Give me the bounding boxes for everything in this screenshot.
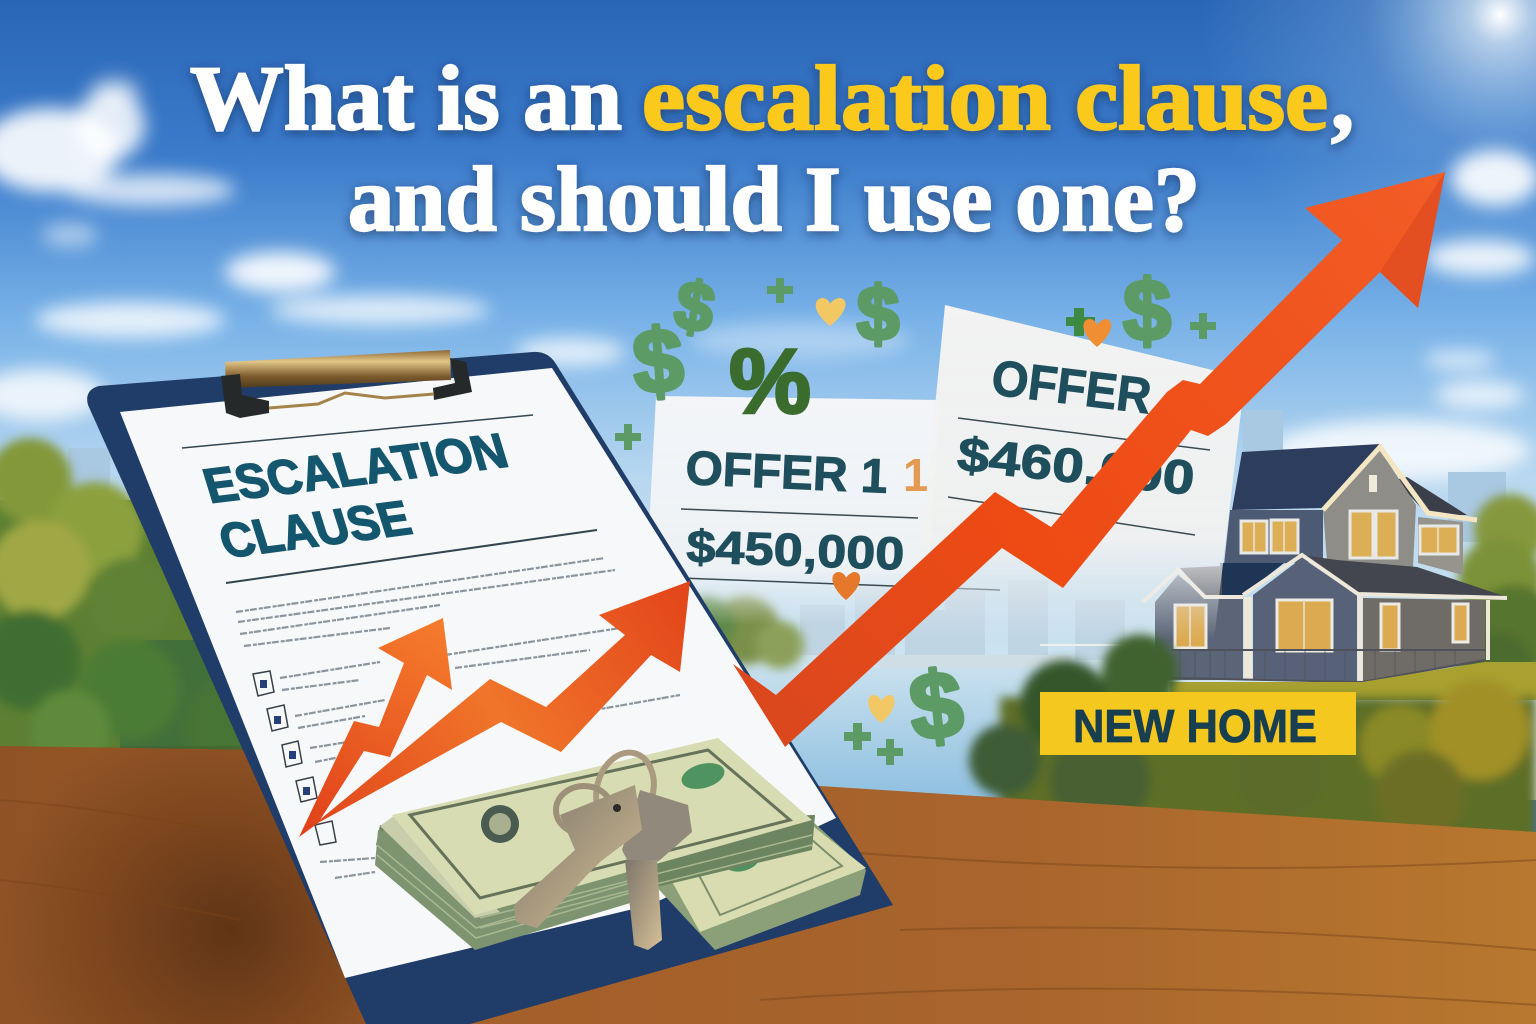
clipboard board xyxy=(87,352,893,1024)
lower cash stack xyxy=(650,800,866,950)
city skyline xyxy=(68,410,1506,675)
clipboard xyxy=(87,350,893,1024)
keys xyxy=(514,746,692,950)
right wing wall xyxy=(1418,517,1463,575)
upper roof xyxy=(1232,444,1380,510)
title xyxy=(190,47,1354,250)
dollar signs: $ xyxy=(857,272,899,357)
dollar signs: $ xyxy=(1123,263,1171,359)
plus signs xyxy=(615,278,1216,765)
clipboard clip xyxy=(221,350,472,418)
offer 1 card: 1 xyxy=(903,449,929,501)
house xyxy=(1040,444,1507,682)
offer 1 label: OFFER 1 xyxy=(685,442,889,504)
upper windows xyxy=(1241,511,1458,558)
dollar signs: $ xyxy=(630,310,687,414)
upper left wall xyxy=(1224,510,1323,565)
upper gable xyxy=(1323,450,1416,568)
new home badge: NEW HOME xyxy=(1073,700,1317,752)
hearts xyxy=(816,298,1111,723)
paper sheet xyxy=(120,368,836,978)
offer 2 card xyxy=(912,305,1245,640)
escalation clause heading: CLAUSE xyxy=(213,491,418,569)
lower roof xyxy=(1302,555,1507,597)
large up arrow on paper xyxy=(299,581,690,837)
sky background xyxy=(0,0,1536,800)
title: and should I use one? xyxy=(348,148,1200,250)
percent sign: % xyxy=(729,331,811,433)
arrow head side shading xyxy=(1380,172,1445,308)
offer 1 price: $450,000 xyxy=(686,520,905,580)
trees across the river xyxy=(675,595,804,669)
left lower wall xyxy=(1155,575,1243,680)
river xyxy=(740,668,1060,803)
trim xyxy=(1143,555,1507,682)
center gable wall xyxy=(1253,558,1357,682)
trees left xyxy=(0,438,320,785)
upper cash stack xyxy=(375,738,815,950)
trees right xyxy=(1457,494,1536,708)
fine print xyxy=(236,558,680,878)
title: , xyxy=(1331,47,1354,149)
offer 2 price: $460,000 xyxy=(955,428,1197,506)
porch railing xyxy=(1172,650,1485,682)
new home badge xyxy=(1040,692,1356,755)
title: escalation clause xyxy=(642,47,1328,149)
heading rules xyxy=(182,415,597,583)
escalation clause heading: ESCALATION xyxy=(197,424,514,514)
back roof xyxy=(1395,477,1467,515)
dollar signs: $ xyxy=(669,266,720,348)
small up arrow xyxy=(299,618,452,837)
title: What is an xyxy=(190,47,622,149)
foreground bushes xyxy=(969,634,1536,847)
checkboxes xyxy=(253,671,336,845)
wood table xyxy=(0,746,1536,1024)
floating icons xyxy=(615,263,1216,765)
dollar signs xyxy=(630,263,1171,760)
dollar signs: $ xyxy=(905,651,968,760)
offer 1 card xyxy=(644,396,1000,625)
porch wall xyxy=(1363,598,1485,682)
clouds xyxy=(0,78,1536,480)
escalation clause heading xyxy=(197,424,514,569)
offer 2 label: OFFER xyxy=(989,349,1154,424)
rising red arrow xyxy=(733,172,1445,747)
cash stacks xyxy=(375,738,866,950)
lower windows xyxy=(1175,600,1468,651)
